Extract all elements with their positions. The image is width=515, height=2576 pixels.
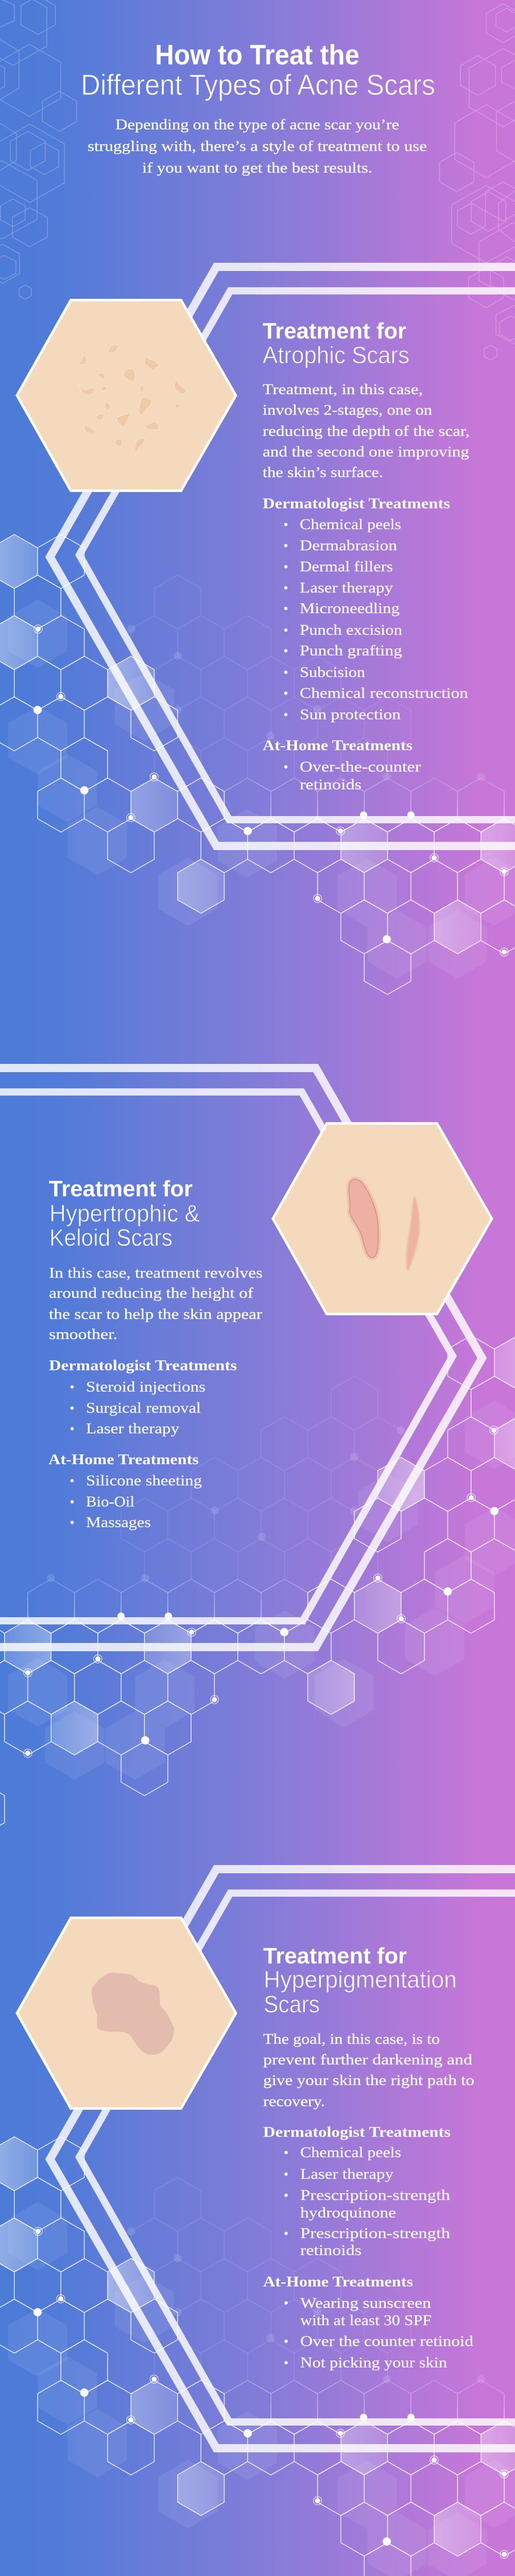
text block: atrophic description: involves 2-stages, one on (263, 402, 432, 418)
list: atrophic dermatologist treatments: Chemical peels (300, 517, 401, 533)
list: atrophic dermatologist treatments: Punch grafting (300, 643, 402, 659)
top left hexagon outlines (0, 0, 77, 299)
list: hyperpigmentation at-home treatments: Not picking your skin (300, 2355, 447, 2371)
list: hyperpigmentation dermatologist treatments: Dermatologist Treatments (263, 2125, 451, 2140)
intro text (88, 117, 427, 176)
list: atrophic dermatologist treatments: Dermal fillers (300, 559, 393, 575)
list: hypertrophic at-home treatments: Massages (86, 1515, 151, 1531)
section 1 honeycomb and connector bands (0, 267, 515, 1035)
heading: hypertrophic and keloid scars: Keloid Scars (49, 1224, 173, 1251)
list: hypertrophic dermatologist treatments (49, 1358, 237, 1437)
list: atrophic dermatologist treatments: Punch excision (300, 622, 402, 638)
list: atrophic dermatologist treatments: Subcision (300, 665, 365, 681)
intro text: Depending on the type of acne scar you’re (115, 117, 399, 133)
text block: hyperpigmentation description: give your skin the right path to (263, 2073, 474, 2089)
list: hyperpigmentation dermatologist treatments: retinoids (300, 2243, 362, 2259)
heading: hyperpigmentation scars: Treatment for (263, 1943, 407, 1969)
top right hexagon outlines (440, 4, 515, 360)
text block: atrophic description: and the second one improving (263, 444, 469, 460)
list: hyperpigmentation dermatologist treatments: Chemical peels (300, 2145, 401, 2161)
list: atrophic dermatologist treatments: Laser therapy (300, 580, 393, 596)
heading: hyperpigmentation scars: Scars (264, 1991, 320, 2018)
text block: atrophic description: reducing the depth of the scar, (263, 423, 470, 439)
list: atrophic at-home treatments (263, 738, 421, 793)
list: hyperpigmentation dermatologist treatments (263, 2125, 451, 2259)
heading: hypertrophic and keloid scars (49, 1176, 200, 1251)
list: hypertrophic dermatologist treatments: Surgical removal (86, 1400, 201, 1416)
heading: hyperpigmentation scars: Hyperpigmentation (264, 1966, 457, 1993)
text block: atrophic description: Treatment, in this case, (263, 382, 423, 398)
list: hyperpigmentation dermatologist treatments: Laser therapy (300, 2166, 394, 2182)
list: hyperpigmentation at-home treatments (263, 2274, 473, 2371)
heading: atrophic scars: Atrophic Scars (263, 342, 409, 368)
list: hypertrophic dermatologist treatments: Laser therapy (86, 1421, 180, 1437)
list: hypertrophic at-home treatments (48, 1452, 202, 1531)
list: hypertrophic at-home treatments: Silicone sheeting (86, 1473, 202, 1489)
text block: atrophic description: the skin’s surface. (263, 465, 383, 481)
text block: hypertrophic description (49, 1265, 263, 1343)
list: hypertrophic dermatologist treatments: Dermatologist Treatments (49, 1358, 237, 1374)
list: atrophic dermatologist treatments: Microneedling (300, 601, 400, 617)
list: hypertrophic dermatologist treatments: Steroid injections (86, 1379, 205, 1395)
heading: atrophic scars: Treatment for (263, 318, 406, 344)
text block: hyperpigmentation description: recovery. (263, 2094, 325, 2110)
section 2 honeycomb and connector bands (0, 1068, 515, 1836)
list: atrophic at-home treatments: Over-the-counter (300, 759, 421, 775)
title: Different Types of Acne Scars (81, 69, 435, 101)
title: How to Treat the (155, 39, 359, 71)
panel: hyperpigmentation scar hexagon (17, 1918, 236, 2108)
intro text: if you want to get the best results. (142, 160, 372, 176)
list: hyperpigmentation at-home treatments: with at least 30 SPF (300, 2313, 432, 2329)
icon: atrophic scar pits (78, 345, 185, 453)
heading: hypertrophic and keloid scars: Hypertrophic & (49, 1200, 200, 1227)
list: atrophic at-home treatments: At-Home Treatments (263, 738, 413, 754)
text block: hyperpigmentation description (263, 2031, 474, 2110)
list: hyperpigmentation at-home treatments: Over the counter retinoid (300, 2334, 473, 2349)
list: atrophic dermatologist treatments (263, 496, 468, 723)
list: atrophic at-home treatments: retinoids (300, 777, 362, 793)
section 3 honeycomb and connector bands (0, 1869, 515, 2576)
list: hyperpigmentation dermatologist treatments: Prescription-strength (300, 2226, 450, 2242)
panel: atrophic scar hexagon (17, 300, 236, 490)
text block: hypertrophic description: the scar to help the skin appear (49, 1307, 263, 1323)
list: hypertrophic at-home treatments: At-Home Treatments (48, 1452, 199, 1468)
text block: hypertrophic description: smoother. (49, 1327, 117, 1343)
list: atrophic dermatologist treatments: Sun protection (300, 707, 401, 723)
list: hypertrophic at-home treatments: Bio-Oil (86, 1494, 134, 1510)
list: atrophic dermatologist treatments: Dermatologist Treatments (263, 496, 450, 512)
icon: hyperpigmentation patch (92, 1973, 174, 2055)
list: atrophic dermatologist treatments: Dermabrasion (300, 538, 397, 554)
list: hyperpigmentation at-home treatments: Wearing sunscreen (300, 2296, 431, 2311)
heading: hypertrophic and keloid scars: Treatment for (49, 1176, 193, 1201)
list: hyperpigmentation dermatologist treatments: hydroquinone (300, 2205, 396, 2221)
heading: atrophic scars (263, 318, 409, 368)
list: atrophic dermatologist treatments: Chemical reconstruction (300, 685, 468, 702)
heading: hyperpigmentation scars (263, 1943, 457, 2018)
text block: hypertrophic description: around reducing the height of (49, 1285, 254, 1301)
text block: atrophic description (263, 382, 470, 481)
intro text: struggling with, there’s a style of treatment to use (88, 139, 427, 155)
icon: raised keloid scars (349, 1179, 419, 1269)
text block: hyperpigmentation description: prevent further darkening and (263, 2052, 472, 2068)
list: hyperpigmentation at-home treatments: At-Home Treatments (263, 2274, 413, 2290)
title (81, 39, 435, 101)
text block: hypertrophic description: In this case, treatment revolves (49, 1265, 263, 1281)
panel: hypertrophic and keloid scar hexagon (273, 1123, 492, 1314)
text block: hyperpigmentation description: The goal, in this case, is to (263, 2031, 440, 2047)
list: hyperpigmentation dermatologist treatments: Prescription-strength (300, 2188, 450, 2204)
